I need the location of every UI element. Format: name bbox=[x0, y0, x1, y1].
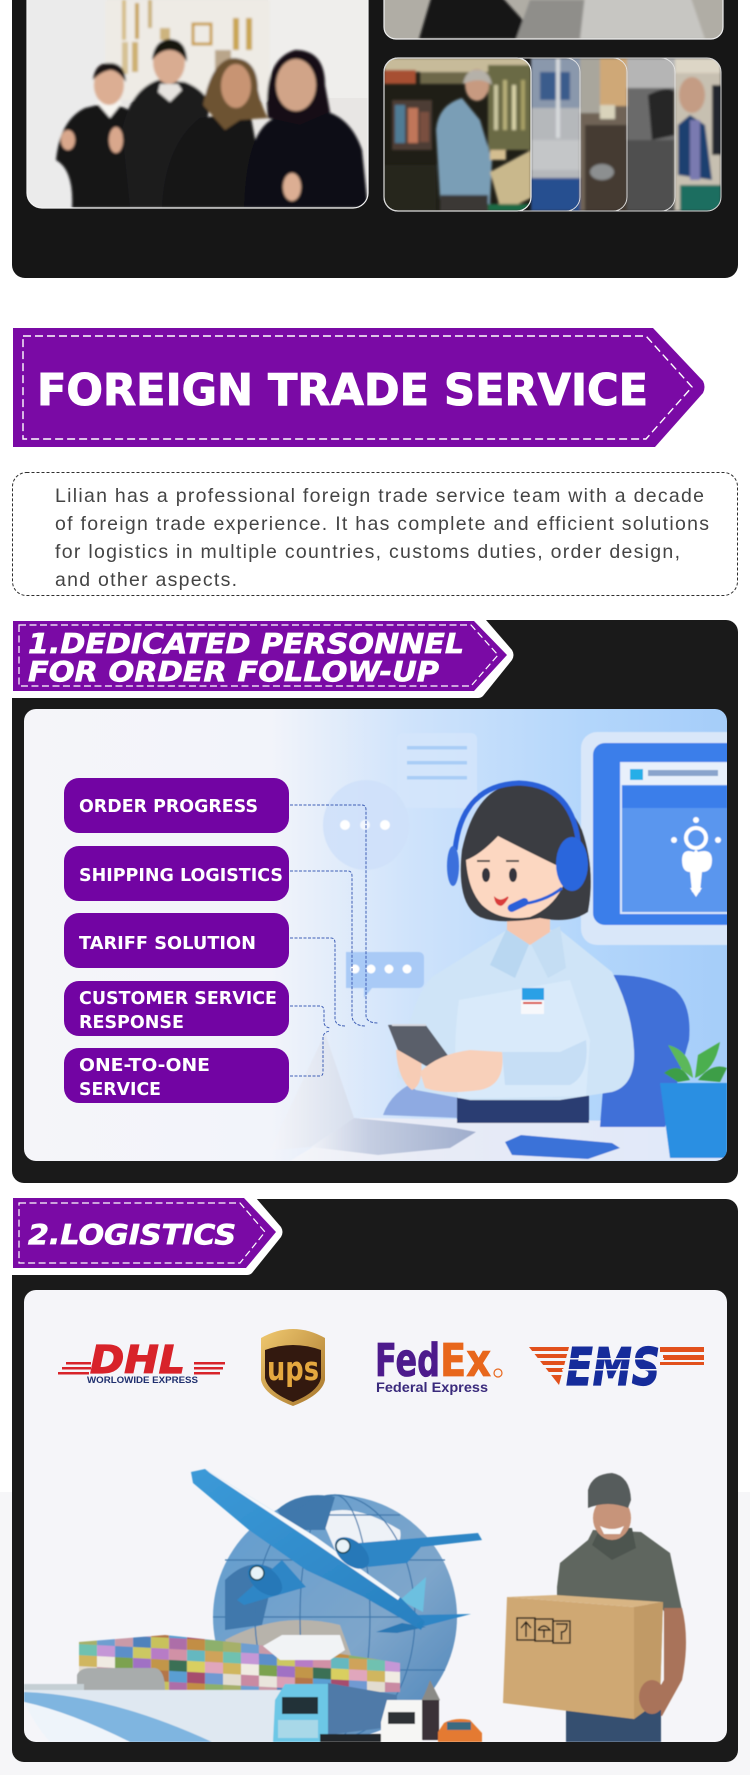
connector lines bbox=[290, 805, 378, 1076]
logo: FedEx bbox=[375, 1334, 502, 1395]
logo: DHL: WORLOWIDE EXPRESS bbox=[87, 1375, 198, 1385]
card: carriers and transport bbox=[24, 1290, 727, 1742]
photo strip: accordion gallery bbox=[384, 58, 721, 211]
person 3 bbox=[188, 114, 258, 208]
illustration: agent with headset bbox=[383, 783, 689, 1127]
icon: box handling marks bbox=[517, 1618, 570, 1643]
icon: chat bubble large bbox=[323, 780, 390, 870]
photo: top right crop bbox=[384, 0, 723, 39]
icon: blue notebook bbox=[505, 1135, 620, 1159]
logo: UPS bbox=[261, 1329, 325, 1406]
pill: shipping logistics bbox=[64, 846, 289, 901]
logo: UPS: ups bbox=[267, 1349, 319, 1388]
illustration: truck bbox=[273, 1683, 397, 1742]
panel: logistics bbox=[12, 1198, 738, 1762]
pill: one-to-one service: ONE-TO-ONE bbox=[79, 1055, 210, 1076]
photo: team in showroom bbox=[27, 0, 368, 208]
illustration: container ship bbox=[24, 1635, 400, 1742]
heading banner: foreign trade service bbox=[13, 328, 704, 447]
illustration: airplane bbox=[191, 1469, 482, 1633]
page background lower tint bbox=[0, 1492, 750, 1775]
text block: service introduction: for logistics in multiple countries, customs duties, order design, bbox=[55, 541, 680, 563]
person 4 bbox=[244, 110, 368, 208]
illustration: van bbox=[381, 1700, 439, 1742]
illustration: orange car bbox=[438, 1719, 482, 1742]
text block: service introduction bbox=[12, 472, 738, 596]
logo: EMS: EMS bbox=[566, 1338, 660, 1398]
section banner: dedicated personnel bbox=[12, 620, 514, 698]
logo: FedEx: Ex bbox=[440, 1334, 491, 1387]
pill: one-to-one service bbox=[64, 1048, 289, 1103]
pill: customer service response: RESPONSE bbox=[79, 1012, 184, 1033]
pill: tariff solution bbox=[64, 913, 289, 968]
logo: FedEx: Fed bbox=[375, 1334, 440, 1387]
panel: company photos bbox=[12, 0, 738, 278]
logo: DHL bbox=[58, 1338, 225, 1385]
icon: chat bubble small bbox=[346, 952, 424, 998]
heading text: FOREIGN TRADE SERVICE bbox=[37, 365, 648, 416]
desk bbox=[290, 1118, 727, 1161]
pill: customer service response bbox=[64, 981, 289, 1036]
pill: one-to-one service: SERVICE bbox=[79, 1079, 161, 1100]
illustration: delivery man bbox=[503, 1473, 686, 1742]
person 1 bbox=[56, 102, 140, 208]
text block: service introduction: Lilian has a professional foreign trade service team with a decade bbox=[55, 485, 704, 507]
pill: tariff solution: TARIFF SOLUTION bbox=[79, 933, 256, 954]
logo: FedEx: Federal Express bbox=[376, 1379, 488, 1395]
section banner: dedicated personnel: 1.DEDICATED PERSONNEL bbox=[28, 627, 464, 660]
laptop bbox=[317, 1035, 476, 1156]
illustration: globe bbox=[213, 1495, 457, 1739]
logo: DHL: DHL bbox=[90, 1338, 185, 1382]
pill: customer service response: CUSTOMER SERVICE bbox=[79, 988, 277, 1009]
card: customer service illustration bbox=[24, 709, 750, 1161]
panel: dedicated personnel bbox=[12, 620, 750, 1183]
section banner: dedicated personnel: FOR ORDER FOLLOW-UP bbox=[28, 655, 440, 688]
section banner: logistics bbox=[12, 1198, 282, 1275]
icon: potted plant bbox=[660, 1042, 727, 1158]
icon: wall monitor bbox=[580, 732, 727, 946]
pill: order progress bbox=[64, 778, 289, 833]
section banner: logistics: 2.LOGISTICS bbox=[28, 1218, 236, 1251]
person 2 bbox=[122, 80, 210, 208]
icon: note card bbox=[406, 734, 478, 809]
text block: service introduction: of foreign trade experience. It has complete and efficient solutions bbox=[55, 513, 709, 535]
text block: service introduction: and other aspects. bbox=[55, 569, 237, 591]
pill: shipping logistics: SHIPPING LOGISTICS bbox=[79, 865, 283, 886]
pill: order progress: ORDER PROGRESS bbox=[79, 796, 258, 817]
